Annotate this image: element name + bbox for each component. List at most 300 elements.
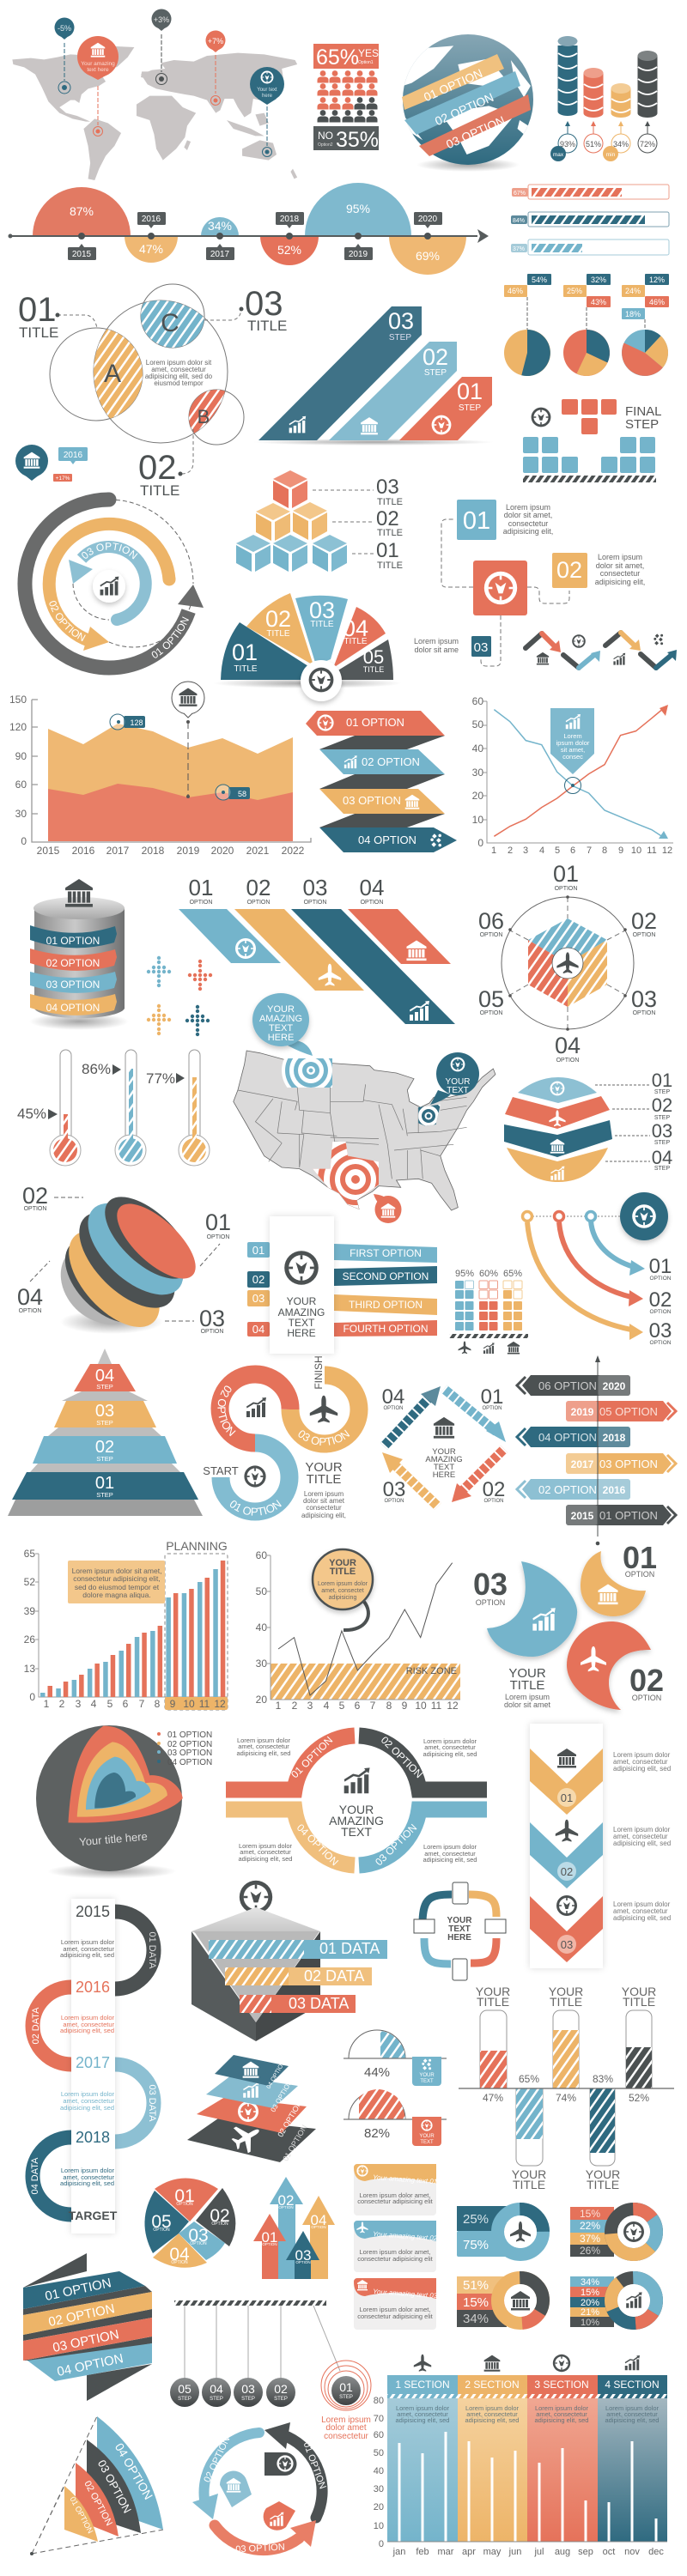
device text: YOUR [447,1916,472,1925]
step labels: STEP [654,1140,670,1146]
step labels: STEP [654,1115,670,1121]
final step label [625,404,662,432]
speech bubble blue: AMAZING [259,1014,302,1024]
timeline notes: adipisicing elit, sed [60,2027,114,2034]
month numbers: 6 [123,1698,129,1710]
arrow 01 [264,2422,328,2518]
red bars [48,1561,225,1697]
risk zone chart: 10 [415,1700,427,1712]
thermometer 77 percent: 77% [146,1070,175,1087]
ribbon 03 [30,972,117,993]
gauge 44 percent [344,2030,447,2086]
arrow labels: 03 [295,2247,311,2264]
planning box [165,1539,228,1710]
box 01: dolor sit amet, [504,511,552,519]
year timeline chevrons [517,1355,676,1545]
venn diagram: A [104,360,121,388]
ribbon 01 [23,2271,145,2309]
risk zone chart: 6 [355,1700,361,1712]
pipe 03 [359,1809,487,1868]
note box: consectetur adipisicing elit, [73,1574,161,1583]
box 02: consectetur [600,569,640,578]
white panel with clock: AMAZING [278,1306,325,1318]
chevron 03 [530,1895,671,1962]
layer blue: 03 OPTION [269,2078,294,2113]
pie three [622,274,669,376]
number tabs: 01 [252,1244,264,1257]
pin: large blue with text: Your text [257,88,277,93]
slanted option ribbons [179,875,455,1024]
pin: plus three percent [151,9,172,84]
chevron 01: Lorem ipsum dolor [613,1751,671,1759]
tube labels: 65% [519,2073,539,2085]
ring notes: Lorem ipsum dolor [423,1737,477,1745]
no banner: NO [318,130,333,142]
axes: 2018 [142,845,165,857]
layer dark blue: 04 OPTION [266,2060,287,2090]
step 03 [54,1401,156,1427]
globe with ribbons [402,34,533,172]
section axes: nov [624,2547,640,2557]
half circles: 69% [416,249,440,263]
diamond labels: 01 [481,1385,503,1409]
section axes: mar [438,2547,454,2557]
donut four values: 37% [580,2233,600,2245]
diamond center text [425,1417,463,1480]
red segment: 02 OPTION [217,1385,235,1437]
crossing line chart: 1 [491,846,496,856]
crescent 02: OPTION [632,1694,661,1702]
risk zone chart: 12 [447,1700,459,1712]
thermometer 45 percent: 45% [17,1106,46,1122]
card 02: Lorem ipsum dolor amet, [360,2248,430,2256]
donut four values [570,2207,656,2257]
sphere labels: OPTION [24,1206,46,1212]
risk zone chart: 5 [339,1700,345,1712]
chevron 03: adipisicing elit, sed [613,1914,671,1922]
arrow labels: OPTION [650,1276,672,1282]
row 2015 [566,1505,672,1525]
final step label: STEP [625,417,659,432]
axes: 2019 [177,845,200,857]
hatched tube chart [459,1985,674,2191]
pin: plus seven percent [206,31,225,105]
hexagon faces [528,918,607,1007]
option 04: 04 OPTION [358,833,416,846]
number tabs: 04 [252,1323,264,1336]
pin: minus five percent [55,17,74,94]
down tubes [516,2088,615,2166]
cube labels [313,476,403,571]
ribbon 03 [419,94,531,156]
option 01: 01 OPTION [346,716,404,729]
ring notes: amet, consectetur [238,1743,289,1750]
sail 03 [87,2440,141,2533]
month numbers: 12 [214,1698,226,1710]
option bars: THIRD OPTION [349,1299,423,1311]
tube labels: TITLE [623,1995,655,2009]
crossing line chart: 30 [472,767,483,779]
row 2018: 04 OPTION [538,1431,597,1444]
cube labels: 01 [376,539,399,562]
title 02: 02 [138,449,177,487]
box 01: 01 [463,507,490,535]
sliced sphere [17,1183,231,1343]
marker 128 [110,714,145,730]
title bubble: TITLE [330,1567,356,1577]
box 01: consectetur [508,519,548,528]
section axes: 30 [374,2484,384,2494]
progress bars [511,185,669,255]
risk zone chart [256,1549,460,1712]
box 03: dolor sit ame [414,646,459,654]
zigzag arrows [526,633,677,668]
timeline notes [60,1938,115,2187]
half circles [33,183,466,275]
cradle bar [174,2300,326,2306]
section notes: Lorem ipsum dolor [465,2404,520,2412]
ring notes: Lorem ipsum dolor [423,1843,477,1851]
step labels: STEP [654,1089,670,1095]
arrow labels: OPTION [650,1309,672,1315]
stacked layers [187,2055,316,2162]
ring notes: Lorem ipsum dolor [237,1737,291,1744]
box 02: 02 [556,557,582,583]
crossing line chart: 6 [570,846,575,856]
cube labels: TITLE [377,497,403,507]
step labels: 04 [652,1147,672,1168]
row 2019: 2019 [571,1406,594,1418]
s curve path [203,1355,368,1521]
section axes: jan [392,2547,405,2557]
axes: 2021 [246,845,270,857]
donut five values: 15% [581,2288,599,2298]
crescent title: YOUR [508,1666,546,1681]
sector labels: TITLE [363,665,384,674]
chevron 01: adipisicing elit, sed [613,1765,671,1773]
risk zone chart: 30 [256,1658,267,1670]
pin: large red with text: text here [87,67,109,73]
red segment [211,1365,299,1452]
risk zone chart: 40 [256,1621,267,1633]
pie two: 43% [591,298,606,306]
sector labels: TITLE [234,664,258,674]
timeline notes: Lorem ipsum dolor [61,2090,115,2098]
year tags: 2020 [418,215,438,224]
risk zone chart: 20 [256,1694,267,1706]
tube axis [459,2088,674,2089]
card 03: Your amazing text 03 [373,2288,438,2300]
sphere labels: OPTION [201,1329,223,1335]
hexagon labels: OPTION [633,1010,655,1016]
cube labels: TITLE [377,561,403,571]
header numbers: 04 [360,875,384,900]
bar 67 percent [512,185,669,199]
layer red [197,2097,307,2138]
sector labels: 05 [363,646,384,668]
crossing line chart: 10 [631,846,641,856]
arrow labels: OPTION [311,2225,326,2229]
option bars: FOURTH OPTION [343,1323,429,1335]
month numbers: 7 [139,1698,145,1710]
arrow labels: 04 [311,2212,326,2228]
red blocks [562,399,617,434]
diamond labels: 03 [383,1478,405,1501]
ribbon 03: 03 OPTION [52,2327,120,2355]
gauge 82 percent: 82% [364,2126,390,2141]
device text [447,1916,472,1943]
header numbers: OPTION [247,900,270,906]
number tabs: 02 [252,1273,264,1286]
layer 02 [505,1096,610,1129]
hatched floor [523,476,656,482]
venn text: eiusmod tempor [154,379,204,387]
ball labels: 02 [274,2382,288,2396]
yes banner: YES [358,47,379,59]
tube labels: YOUR [512,2167,546,2181]
s curve text: TITLE [307,1472,341,1487]
step 02 [33,1436,177,1464]
sail 01: 01 OPTION [69,2495,94,2535]
sector 02 [246,593,313,665]
option bars: FIRST OPTION [350,1247,422,1259]
hexagon labels: 05 [478,986,504,1012]
ribbon 04 [30,994,117,1015]
chevron 03: 03 [561,1938,573,1951]
month numbers: 2 [59,1698,65,1710]
sphere labels [17,1183,231,1335]
section axes: 60 [374,2430,384,2440]
axes: 30 [15,808,27,820]
ring notes: adipisicing elit, sed [423,1750,477,1758]
stack 51 percent [584,68,603,153]
crossing line chart: 2 [508,846,513,856]
arrow 03: 03 OPTION [235,2543,285,2555]
crescent 01: OPTION [625,1570,654,1579]
option bars [334,1244,437,1336]
blue segment: 01 OPTION [230,1500,282,1516]
square grid chart [449,1269,528,1354]
stack 93 percent: 93% [560,140,575,148]
section headers: 3 SECTION [534,2379,589,2391]
ribbon 01 [402,54,504,110]
section headers [387,2375,667,2394]
timeline notes: amet, consectetur [63,2097,114,2105]
row 2017 [566,1453,672,1474]
years: 2015 [76,1903,110,1920]
option 02: 02 OPTION [362,755,420,768]
s curve icons [244,1396,337,1488]
section axes: jul [533,2547,544,2557]
crescent title: Lorem ipsum [505,1693,550,1701]
section axes: aug [555,2547,570,2557]
callout: sit amet, [561,746,585,754]
thermometer 45 percent [17,1050,81,1166]
crescent 03 [473,1561,577,1657]
year tags: 2019 [349,250,368,259]
dark folds [319,736,445,827]
arrow 02: 02 OPTION [49,601,86,642]
month numbers: 9 [170,1698,176,1710]
axes: 60 [15,779,27,791]
timeline notes: Lorem ipsum dolor [61,2167,115,2174]
map landmasses [12,45,297,180]
card 01: Your amazing text 01 [373,2173,437,2185]
pie three: 12% [649,276,665,284]
arrow labels [262,2192,326,2264]
crossing line chart: 50 [472,718,483,730]
icon: bank on cylinder [65,879,93,907]
crescent title [504,1666,551,1709]
bank pin with year tag [15,445,88,482]
target texas [313,1142,379,1209]
title 03 [204,285,287,334]
crescent 02: 02 [629,1663,664,1698]
donut five values [570,2276,656,2328]
orange column [503,1281,522,1330]
flow chart [414,500,645,666]
sphere labels: 01 [205,1209,231,1235]
arrow 03 [215,2520,316,2555]
row 2019 [566,1401,672,1421]
device connections [414,1882,506,1980]
impact note: dolor amet [325,2423,367,2433]
ball labels: 05 [178,2382,192,2396]
layer red: 02 OPTION [276,2100,303,2138]
step 02: STEP [96,1455,113,1463]
section notes [396,2404,660,2424]
stack 34 percent: min [606,152,616,158]
blue bars [40,1569,218,1697]
stack 93 percent: max [553,152,564,158]
diamond labels: OPTION [482,1406,502,1411]
callout: Lorem [563,732,582,740]
speech bubble dark: TEXT [447,1086,469,1095]
marker 128: 128 [130,718,143,727]
device text: HERE [447,1933,471,1943]
title bubble [313,1549,373,1630]
crossing line chart: 3 [523,846,528,856]
ribbon 02 [30,949,117,971]
row 2016: 2016 [603,1484,626,1496]
world map with pins [12,9,297,180]
note box: sed do eiusmod tempor et [75,1583,160,1591]
up tubes [480,2010,652,2088]
impact note: Lorem ipsum [321,2415,371,2425]
sector labels: 02 [265,606,291,632]
pin bank [172,682,204,798]
ribbon 01: 01 OPTION [422,66,484,104]
timeline notes: Lorem ipsum dolor [61,1938,115,1946]
inner red drop [264,2501,295,2531]
pie one: 46% [508,287,523,295]
layered circle steps [504,1070,672,1182]
option 03: 03 OPTION [343,794,401,807]
cube labels: TITLE [377,528,403,538]
row 2020 [522,1375,630,1396]
section notes: adipisicing elit, sed [535,2416,588,2424]
donut five values: 10% [581,2318,599,2328]
section axes: may [483,2547,502,2557]
concentric arrows [17,493,204,675]
usa map [234,993,495,1240]
yes banner [313,44,379,70]
sector labels: TITLE [310,620,334,629]
section axes: 70 [374,2414,384,2424]
section axes: feb [416,2547,429,2557]
bar 84 percent: 84% [513,218,525,224]
diamond center text: HERE [433,1470,455,1480]
sphere labels: 03 [199,1306,225,1331]
donut five values: 21% [581,2307,599,2318]
ring notes: amet, consectetur [240,1848,291,1856]
cube labels: 03 [376,476,399,499]
dotted arrows [147,956,212,1036]
rising arrows [253,2177,335,2279]
axes: 120 [9,721,27,733]
risk zone chart: 7 [370,1700,376,1712]
diamond labels: 02 [483,1478,505,1501]
chevron 03: Lorem ipsum dolor [613,1900,671,1908]
chevron 01: 01 [561,1791,573,1804]
month numbers: 5 [107,1698,113,1710]
03 data arc [115,2064,157,2142]
folded ribbon [23,2253,152,2401]
ribbon 04 [27,2343,152,2381]
pinwheel [144,2179,235,2268]
axes: 0 [21,835,27,847]
timeline notes: amet, consectetur [63,1945,114,1953]
timeline with half circles [9,183,489,275]
hexagon labels: OPTION [633,932,655,938]
ribbon 01: 01 OPTION [44,2276,112,2304]
01 data arc: 01 DATA [147,1931,157,1969]
layer blue [206,2076,298,2113]
sector 01 [221,622,311,680]
ring notes: amet, consectetur [424,1743,476,1751]
tube labels: YOUR [586,2167,620,2181]
section notes: amet, consectetur [606,2410,658,2418]
donut five values: 34% [581,2277,599,2288]
red area [48,784,293,841]
box 01 [457,500,553,540]
card 02 [354,2221,438,2272]
pin: large red with text [77,36,119,136]
people poll [313,44,379,152]
stack 72 percent [637,51,658,153]
section bar chart [374,2355,667,2557]
s curve text: dolor sit amet [303,1497,345,1505]
speech bubble blue: YOUR [267,1004,295,1015]
04 data arc [30,2137,71,2215]
card 01: consectetur adipisicing elit [357,2197,434,2205]
option 01 [306,711,445,736]
pie three: 24% [625,287,641,295]
sector labels: TITLE [266,629,290,639]
timeline notes: adipisicing elit, sed [60,1951,114,1959]
speech bubble dark [430,1052,479,1105]
row 2016 [522,1479,630,1500]
row 2016: 02 OPTION [538,1483,597,1496]
section axes: 80 [374,2396,384,2406]
no banner [313,126,379,152]
pie two: 32% [591,276,606,284]
intersection marker [565,778,581,793]
final step blocks [523,399,662,482]
chevron 02: amet, consectetur [613,1833,668,1840]
bank pin with year tag: 2016 [64,451,83,460]
ribbon 02: 02 OPTION [47,2301,116,2330]
